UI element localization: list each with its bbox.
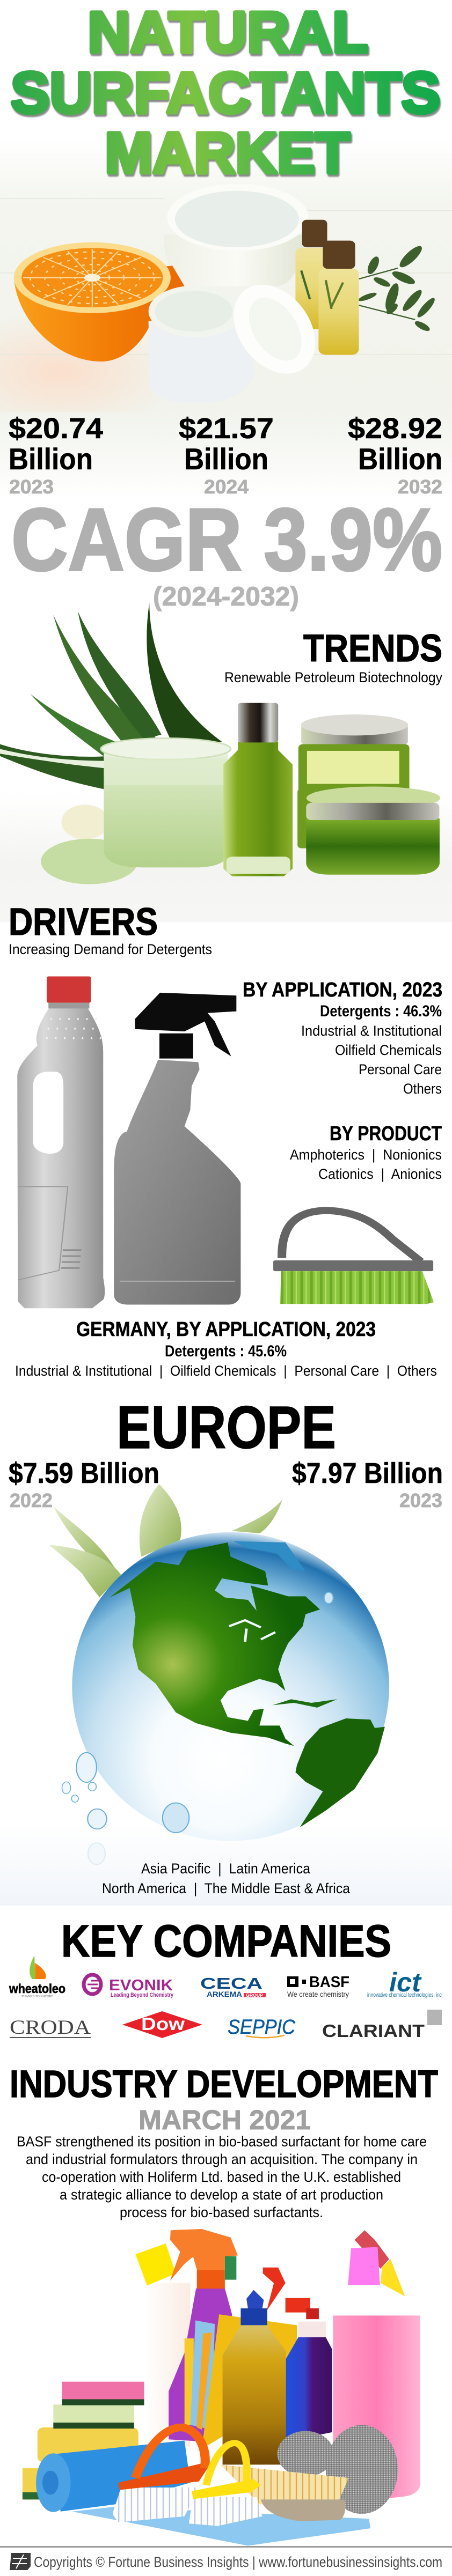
logo: croda: CRODA [10, 2017, 91, 2039]
market value 2024: Billion [184, 442, 268, 476]
logo: clariant: CLARIANT [322, 2021, 425, 2041]
logo: basf: We create chemistry [287, 1990, 349, 1998]
yellow brush [189, 2443, 263, 2526]
market value 2023: Billion [9, 442, 93, 476]
sponges [23, 2382, 144, 2499]
other regions text: North America | The Middle East & Africa [102, 1880, 351, 1896]
title [11, 0, 440, 185]
trends image: aloe and green cosmetics [0, 603, 452, 922]
market value 2024: $21.57 [179, 412, 274, 445]
market value 2032: Billion [358, 442, 442, 476]
market value 2023 [9, 412, 103, 498]
cleaning cloths [185, 2314, 297, 2449]
footer rule [0, 2547, 452, 2548]
germany by application panel [15, 1318, 437, 1379]
caribbean islands [272, 1699, 337, 1708]
logo: ceca arkema: GROUP [246, 1993, 264, 1998]
footer logo [10, 2553, 31, 2570]
development paragraph: process for bio-based surfactants. [120, 2204, 323, 2220]
steel scourers [278, 2425, 398, 2514]
pink bottle [333, 2230, 420, 2499]
logo: evonik: EVONIK [109, 1977, 173, 1994]
sprig of leaves [358, 244, 437, 333]
front cream jar with lid [149, 274, 331, 403]
logo: clariant [322, 2010, 442, 2041]
leaves [49, 1484, 282, 1598]
logo: dow: Dow [141, 2014, 185, 2034]
by application panel: Personal Care [359, 1061, 442, 1077]
europe value 2022 [9, 1457, 159, 1511]
drivers text: Increasing Demand for Detergents [9, 941, 212, 957]
logo: evonik [84, 1975, 174, 1998]
great lakes [229, 1620, 275, 1642]
logo: basf: BASF [309, 1974, 349, 1991]
south america [295, 1718, 385, 1827]
logo: seppic: SEPPIC [228, 2016, 295, 2039]
greenland [234, 1541, 305, 1571]
development paragraph [17, 2134, 427, 2220]
title: SURFACTANTS [11, 60, 440, 125]
by product panel: Cationics | Anionics [318, 1166, 442, 1182]
wooden brush [221, 2464, 349, 2521]
lower green jar [297, 786, 440, 875]
logo: ict: ict [389, 1967, 422, 1997]
yellow dish soap bottle [223, 2290, 286, 2464]
oil bottles with cork [295, 220, 359, 355]
half orange [14, 242, 185, 361]
blue bottle [282, 2322, 332, 2442]
development paragraph: a strategic alliance to develop a state of art production [60, 2187, 383, 2203]
back cream jar [164, 184, 309, 286]
globe sphere [72, 1532, 389, 1841]
upper green jar [298, 714, 410, 792]
floor reflection [0, 1825, 452, 1906]
logo: ict [367, 1967, 442, 1998]
logo: ceca arkema: ARKEMA [207, 1990, 242, 1998]
key companies heading: KEY COMPANIES [61, 1916, 391, 1966]
market value 2023: $20.74 [9, 412, 103, 445]
globe illustration [49, 1484, 389, 1864]
silver bottle with red cap [17, 977, 105, 1308]
orange brush [112, 2427, 208, 2522]
germany by application panel: GERMANY, BY APPLICATION, 2023 [76, 1318, 376, 1341]
development paragraph: BASF strengthened its position in bio-based surfactant for home care [17, 2134, 427, 2150]
development paragraph: and industrial formulators through an acquisition. The company in [26, 2151, 418, 2167]
by product panel: Amphoterics | Nonionics [290, 1147, 442, 1163]
blue bin bag roll [36, 2441, 190, 2512]
aloe leaves [0, 603, 222, 789]
europe value 2023: 2023 [399, 1489, 442, 1511]
market value 2032: $28.92 [348, 412, 442, 445]
north america [110, 1542, 320, 1746]
logo: ceca arkema: CECA [200, 1975, 263, 1992]
europe value 2022: $7.59 Billion [9, 1457, 159, 1489]
purple spray bottle [169, 2229, 238, 2442]
detergent bottles image [17, 977, 240, 1308]
red sprayer [263, 2268, 319, 2319]
other regions text: Asia Pacific | Latin America [141, 1861, 311, 1877]
logo: ceca arkema [200, 1975, 266, 1998]
title: MARKET [105, 120, 350, 185]
logo: basf [287, 1974, 349, 1998]
development paragraph: co-operation with Holiferm Ltd. based in the U.K. established [42, 2169, 401, 2185]
foam jar [101, 738, 231, 867]
germany by application panel: Detergents : 45.6% [165, 1342, 287, 1360]
europe value 2022: 2022 [10, 1489, 53, 1511]
title: NATURAL [88, 0, 368, 64]
europe heading: EUROPE [116, 1394, 336, 1461]
soap bars [41, 804, 138, 884]
logo: wheatoleo: wheatoleo [9, 1982, 65, 1996]
market value 2024: 2024 [204, 476, 249, 498]
grey spray bottle [114, 993, 240, 1305]
market value 2032: 2032 [398, 476, 442, 498]
by application panel: Others [403, 1081, 442, 1097]
water droplets [62, 1592, 333, 1864]
hero background [0, 0, 452, 515]
market value 2023: 2023 [9, 476, 54, 498]
logo: dow [122, 2011, 202, 2038]
market value 2024 [179, 412, 274, 498]
logo: evonik: Leading Beyond Chemistry [111, 1992, 174, 1998]
date: MARCH 2021 [138, 2105, 311, 2135]
yellow sprayer tab [135, 2243, 176, 2285]
glass bottle with silver cap [223, 703, 293, 876]
blue floor cloth [72, 2507, 370, 2545]
by application panel: Oilfield Chemicals [335, 1042, 442, 1058]
by application panel [243, 979, 442, 1097]
company logos [9, 1955, 442, 2041]
europe value 2023 [292, 1457, 443, 1511]
market value 2032 [348, 412, 442, 498]
logo: wheatoleo: THANKS TO NATURE [21, 1995, 53, 1998]
scrubbing brush [273, 1211, 434, 1304]
cleaning products image [23, 2229, 420, 2545]
by application panel: Industrial & Institutional [301, 1023, 442, 1039]
logo: wheatoleo [9, 1955, 65, 1998]
hero image: citrus and cream cosmetics [0, 184, 452, 412]
other regions text [102, 1861, 351, 1896]
by product panel [290, 1123, 442, 1182]
drivers heading: DRIVERS [9, 901, 158, 943]
CAGR period: (2024-2032) [153, 581, 299, 611]
